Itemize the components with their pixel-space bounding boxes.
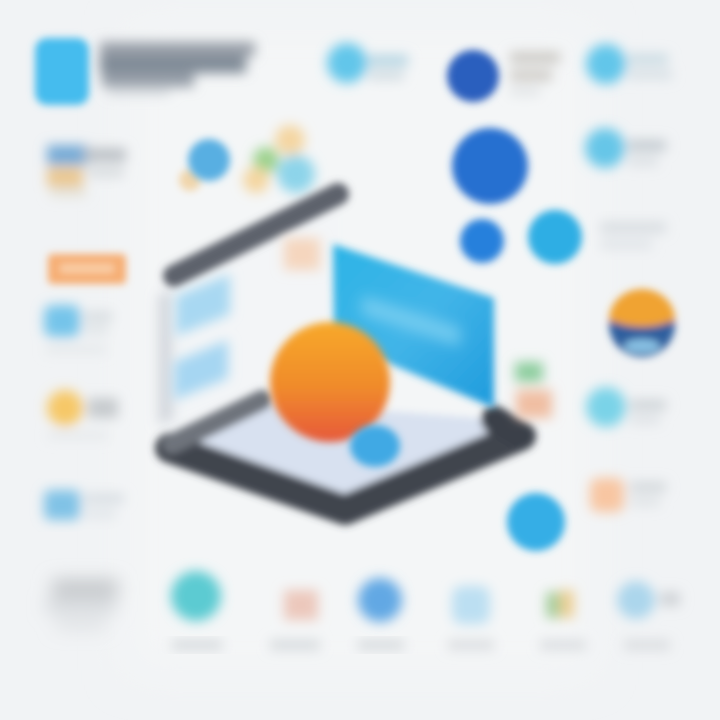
top row: dark blue circle xyxy=(447,50,499,102)
right item: orange icon row xyxy=(590,478,666,512)
bottom row: pale blue icon xyxy=(448,586,494,650)
background glow xyxy=(130,30,590,670)
small green orange stack icon xyxy=(515,362,552,418)
large blue circle xyxy=(452,128,528,204)
bottom row: multicolour icon xyxy=(540,590,586,650)
bottom row: light blue icon with text xyxy=(617,581,680,650)
left item: blue icon with text xyxy=(44,305,112,353)
top row: feature item right xyxy=(586,44,672,84)
small blue and orange circle icon xyxy=(179,139,230,191)
screen content blocks xyxy=(174,238,320,400)
blue disc on keyboard xyxy=(350,425,400,467)
laptop screen xyxy=(158,200,340,440)
cyan circle bottom xyxy=(507,493,565,551)
orange cube xyxy=(270,322,390,442)
bottom row: teal circle xyxy=(171,571,222,650)
right item: top second row xyxy=(585,128,666,168)
bottom row: colour icon xyxy=(270,590,320,650)
left item: orange icon with text xyxy=(47,390,118,439)
right item: cyan icon with text xyxy=(586,387,666,427)
blue floating panel xyxy=(333,244,494,408)
left item: blue icon with lines xyxy=(44,490,124,520)
left orange label xyxy=(48,254,126,284)
title text lines xyxy=(100,42,255,95)
multicolour icon cluster xyxy=(243,125,315,193)
cyan circle node xyxy=(528,210,582,264)
left item: chart card xyxy=(47,145,126,197)
blue circle node small xyxy=(460,219,504,263)
right text block xyxy=(600,222,666,249)
central laptop illustration xyxy=(158,194,552,510)
laptop base xyxy=(168,400,523,510)
top row: feature item 1 xyxy=(327,43,408,83)
logo tile xyxy=(35,38,89,105)
header: logo and title xyxy=(35,38,255,105)
laptop top bar xyxy=(174,194,338,276)
bottom row: blue circle xyxy=(358,578,404,650)
right orange and navy sphere xyxy=(609,289,675,357)
bottom row: text item 1 xyxy=(46,580,118,629)
top row: text beside dark circle xyxy=(510,52,560,95)
